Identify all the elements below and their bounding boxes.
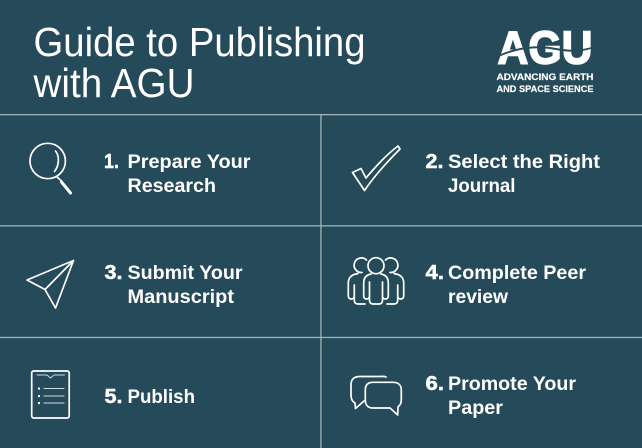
- step 1: prepare your research: [30, 143, 251, 197]
- step 1 text: 1.: [104, 151, 119, 173]
- step 3 text: 3.: [104, 262, 122, 284]
- step 4 text: [426, 262, 586, 308]
- AGU logo: AGU: [498, 22, 592, 74]
- step 6 text: 6.: [426, 373, 444, 395]
- step 6: promote your paper: [351, 373, 576, 419]
- step 4 text: 4.: [426, 262, 444, 284]
- AGU logo: ADVANCING EARTH: [496, 72, 594, 82]
- step 5 text: Publish: [128, 386, 195, 408]
- AGU logo: AND SPACE SCIENCE: [496, 84, 594, 94]
- step 4: complete peer review: [348, 258, 586, 308]
- icon: check mark: [352, 146, 400, 190]
- step 2 text: Journal: [448, 175, 516, 197]
- step 1 text: Research: [128, 175, 216, 197]
- step 5: publish: [32, 371, 195, 418]
- step 2 text: Select the Right: [448, 151, 601, 173]
- step 3 text: [104, 262, 243, 308]
- title: Guide to Publishing: [34, 19, 366, 65]
- title: with AGU: [33, 60, 194, 106]
- step 5 text: 5.: [104, 386, 122, 408]
- step 1 text: Prepare Your: [128, 151, 251, 173]
- step 6 text: Paper: [448, 397, 503, 419]
- icon: document list: [32, 371, 69, 418]
- step 1 text: [104, 151, 251, 197]
- step 3 text: Submit Your: [128, 262, 243, 284]
- icon: paper plane: [27, 260, 74, 308]
- AGU logo: [494, 22, 596, 94]
- step 3 text: Manuscript: [128, 286, 235, 308]
- icon: magnifying glass: [30, 143, 70, 193]
- step 2 text: [426, 151, 601, 197]
- step 2 text: 2.: [426, 151, 444, 173]
- step 3: submit your manuscript: [27, 260, 243, 308]
- step 6 text: Promote Your: [448, 373, 576, 395]
- title: [33, 19, 366, 106]
- step 4 text: Complete Peer: [448, 262, 586, 284]
- step 6 text: [426, 373, 576, 419]
- icon: speech bubbles: [351, 376, 401, 415]
- icon: group of people: [348, 258, 404, 304]
- step 2: select the right journal: [352, 146, 601, 197]
- step 4 text: review: [448, 286, 509, 308]
